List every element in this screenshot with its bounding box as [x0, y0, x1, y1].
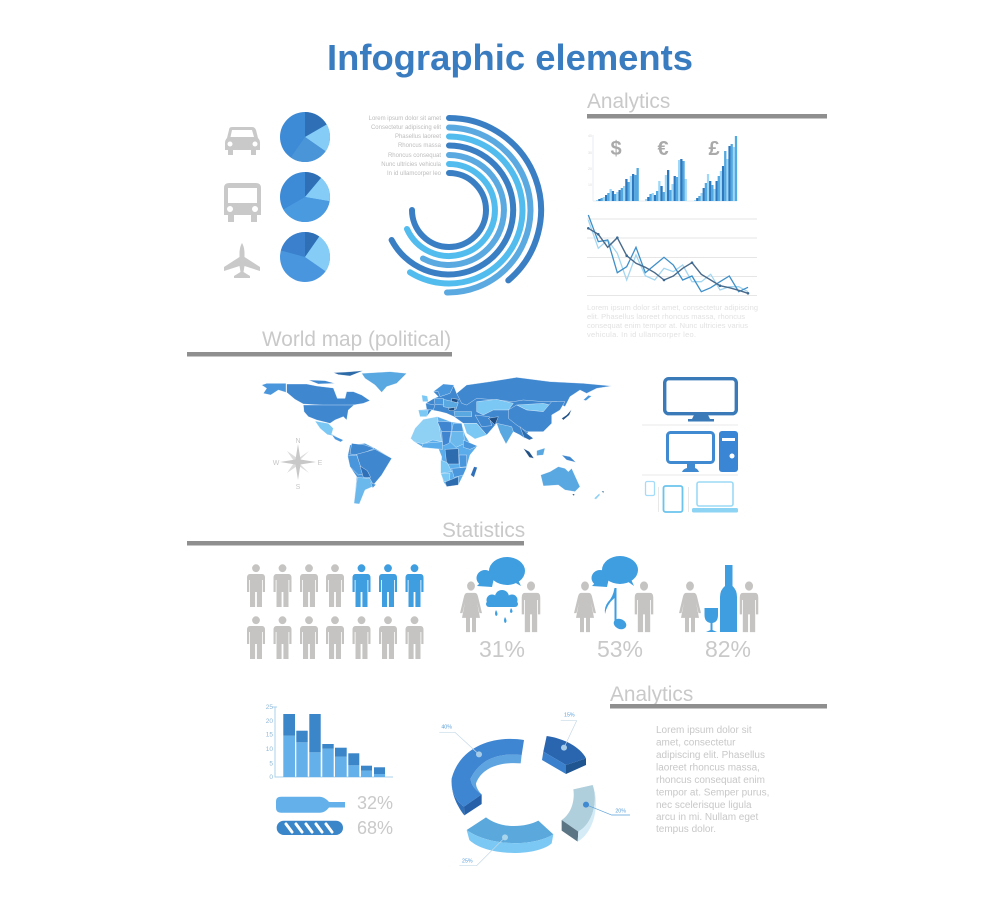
icon: plane: [224, 243, 260, 278]
icon: bus: [224, 183, 261, 222]
line chart: [587, 215, 757, 296]
map: eurasia: [418, 377, 612, 458]
title: Infographic elements: [327, 37, 693, 78]
radial chart labels: In id ullamcorper leo: [387, 171, 442, 177]
callout dots: [476, 745, 589, 840]
paragraph: analytics bottom: nec scelerisque ligula: [656, 800, 752, 811]
radial chart labels: Lorem ipsum dolor sit amet: [369, 116, 441, 122]
callout lines: [439, 721, 630, 866]
statistic: weather 31%: [460, 557, 540, 662]
pictogram: people row 2: [247, 616, 424, 659]
paragraph: analytics bottom: [656, 725, 769, 835]
pie chart: car: [280, 112, 330, 162]
compass: [273, 438, 323, 491]
segment: 40%: [452, 739, 524, 815]
stacked bar chart: 25: [266, 704, 273, 711]
paragraph: analytics top: elit. Phasellus laoreet rhoncus massa, rhoncus: [587, 312, 745, 321]
statistic: music 53%: 53%: [597, 636, 643, 662]
icon: large monitor: [665, 379, 736, 422]
bread bar 68%: 68%: [357, 818, 393, 838]
heading: analytics bottom: Analytics: [610, 683, 693, 706]
stacked bar chart: 15: [266, 732, 273, 738]
map: south america: [348, 443, 392, 504]
paragraph: analytics top: consequat enim tempor at. Nunc ultricies varius: [587, 321, 748, 330]
currency bar charts: 10: [588, 183, 592, 187]
radial chart labels: Rhoncus consequat: [388, 153, 441, 159]
radial chart labels: [369, 116, 442, 177]
callout labels: [441, 713, 626, 865]
pie chart: bus: [280, 172, 330, 222]
callout labels: 15%: [564, 713, 575, 719]
radial chart labels: Nunc ultricies vehicula: [381, 162, 442, 168]
statistic: music 53%: [574, 556, 653, 662]
compass: S: [296, 484, 301, 491]
paragraph: analytics bottom: rhoncus consequat enim: [656, 775, 765, 786]
statistic: wine 82%: [679, 565, 758, 662]
radial chart labels: Phasellus laoreet: [395, 134, 441, 140]
callout labels: 20%: [615, 809, 626, 815]
icon: car: [225, 127, 260, 155]
currency bar charts: $: [610, 138, 622, 160]
map: north america: [262, 371, 407, 442]
compass: N: [295, 438, 301, 445]
bottle bar 32%: [276, 793, 393, 813]
segment: 15%: [542, 736, 586, 774]
radial chart labels: Rhoncus massa: [398, 143, 442, 149]
heading: analytics top: Analytics: [587, 90, 670, 113]
heading: world map: World map (political): [262, 328, 451, 351]
paragraph: analytics bottom: arcu in mi. Nullam eget: [656, 812, 758, 823]
paragraph: analytics bottom: tempor at. Semper purus,: [656, 788, 769, 798]
compass: E: [318, 460, 323, 467]
currency bar charts: €: [657, 138, 669, 160]
radial bar chart: [392, 118, 541, 293]
currency bar charts: 20: [588, 167, 592, 171]
currency bar charts: [588, 134, 737, 201]
currency bar charts: £: [708, 138, 720, 160]
compass: W: [273, 460, 280, 467]
icon: desktop computer: [668, 431, 738, 472]
stacked bar chart: 5: [269, 760, 273, 768]
pictogram: people row 1: [247, 564, 424, 607]
paragraph: analytics top: [587, 303, 758, 339]
callout labels: 25%: [462, 859, 473, 865]
pie chart: plane: [280, 232, 330, 282]
statistic: weather 31%: 31%: [479, 636, 525, 662]
stacked bar chart: 20: [266, 718, 273, 725]
radial chart labels: Consectetur adipiscing elit: [371, 125, 441, 131]
paragraph: analytics bottom: laoreet rhoncus massa,: [656, 762, 760, 774]
paragraph: analytics top: Lorem ipsum dolor sit amet, consectetur adipiscing: [587, 303, 758, 312]
paragraph: analytics top: vehicula. In id ullamcorper leo.: [587, 330, 696, 339]
3D donut chart: [439, 713, 630, 866]
paragraph: analytics bottom: Lorem ipsum dolor sit: [656, 725, 752, 736]
world map: [262, 371, 612, 504]
stacked bar chart: [266, 704, 393, 781]
segment: 20%: [562, 785, 596, 842]
icon: phone, tablet and laptop: [642, 425, 738, 512]
statistic: wine 82%: 82%: [705, 636, 751, 662]
paragraph: analytics bottom: tempus dolor.: [656, 824, 716, 835]
paragraph: analytics bottom: adipiscing elit. Phasellus: [656, 750, 765, 761]
currency bar charts: 30: [588, 151, 592, 155]
currency bar charts: 40: [588, 134, 592, 138]
callout labels: 40%: [441, 724, 452, 730]
paragraph: analytics bottom: amet, consectetur: [656, 738, 736, 748]
map: oceania: [541, 455, 604, 499]
map: africa: [411, 417, 477, 487]
stacked bar chart: 10: [266, 746, 273, 753]
stacked bar chart: 0: [269, 774, 273, 781]
bread bar 68%: [277, 818, 393, 838]
heading: statistics: Statistics: [442, 519, 525, 542]
segment: 25%: [467, 817, 553, 853]
bottle bar 32%: 32%: [357, 793, 393, 813]
